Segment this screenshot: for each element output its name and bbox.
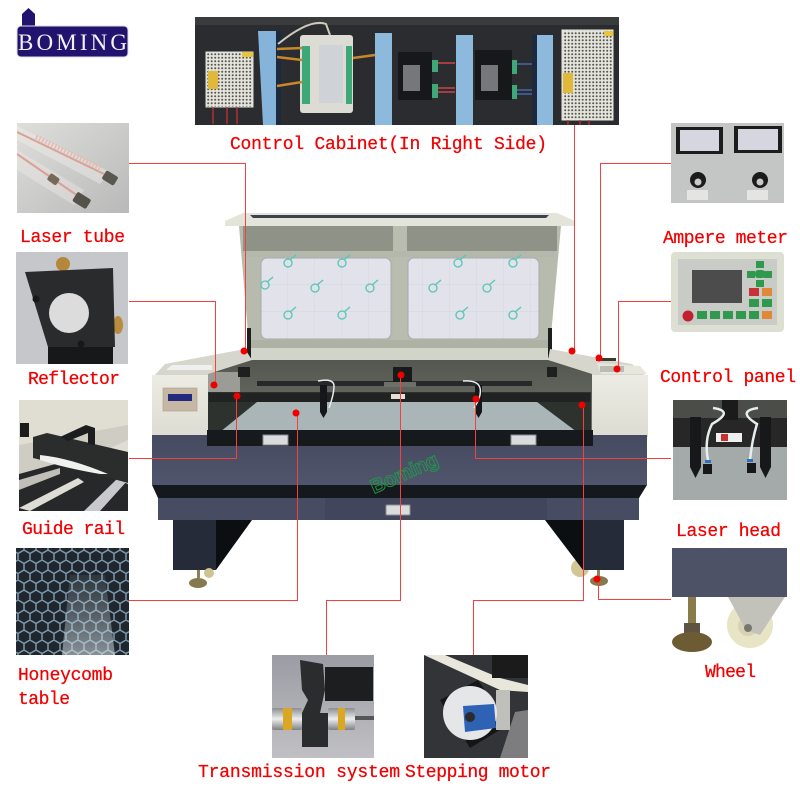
laser head: left [318,380,334,418]
label: honeycomb table [18,666,113,710]
label: stepping motor: Stepping motor [405,763,551,783]
photo: laser head [673,400,787,500]
label: reflector: Reflector [28,370,120,390]
leg: right [545,520,624,586]
photo: guide rail [19,400,128,511]
photo: stepping motor [424,655,528,758]
machine body [152,430,647,520]
label: laser tube: Laser tube [20,228,125,248]
label: control panel: Control panel [660,368,796,388]
label: laser head: Laser head [676,522,781,542]
heading: control cabinet: Control Cabinet(In Right Side) [230,135,547,155]
callout dots [210,348,620,582]
logo: Boming: BOMING [18,30,127,55]
photo: control cabinet [195,17,619,125]
left console [152,349,252,437]
handles [263,435,536,515]
photo: wheel [672,548,787,652]
label: wheel: Wheel [705,663,756,683]
label: honeycomb table: Honeycomb [18,666,113,686]
lid window: left [261,255,391,339]
machine lid [225,213,575,360]
logo: Boming [17,8,128,57]
label: ampere meter: Ampere meter [663,229,788,249]
laser head: right [463,381,482,418]
lid window: right [408,255,539,339]
photo: reflector [16,252,128,364]
machine interior [207,360,592,436]
watermark: Boming: Boming [367,449,442,499]
label: transmission system: Transmission system [198,763,400,783]
leg: left [173,520,252,588]
label: honeycomb table: table [18,690,70,710]
photo: transmission system [272,655,374,758]
leader lines [129,125,671,655]
photo: control panel [671,252,784,332]
label: guide rail: Guide rail [22,520,125,540]
photo: ampere meter [671,123,784,203]
right console with panel [548,349,648,437]
machine: laser cutter [152,213,648,588]
photo: laser tube [17,123,129,213]
photo: honeycomb table [16,548,129,655]
